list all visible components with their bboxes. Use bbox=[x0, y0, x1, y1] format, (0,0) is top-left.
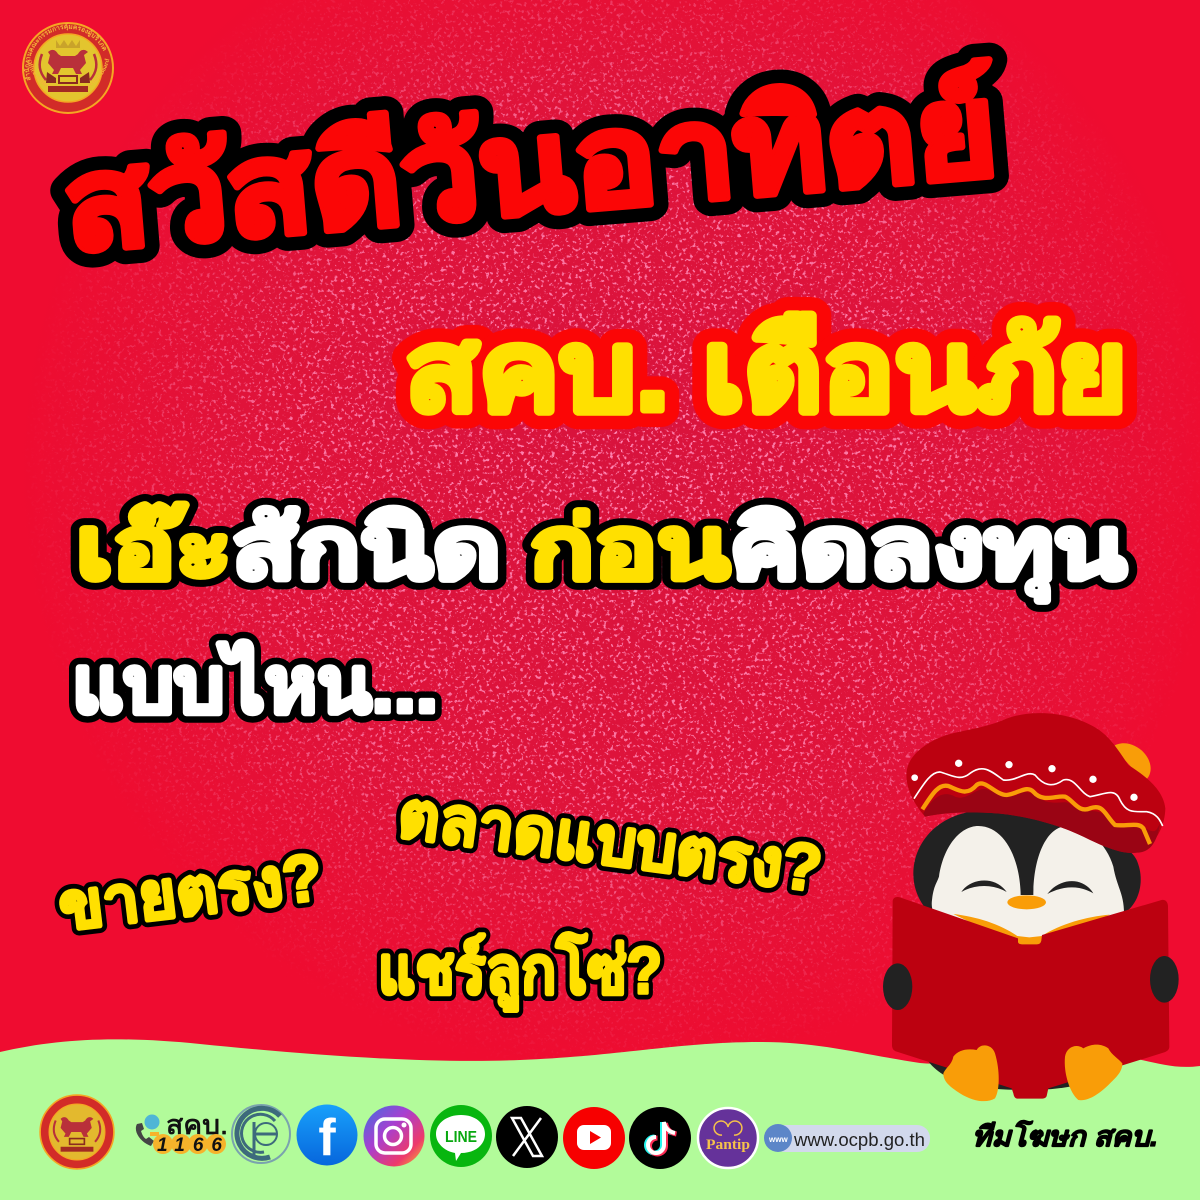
subheading: what kind: แบบไหน... bbox=[72, 640, 438, 729]
logo: OCPB seal footer bbox=[40, 1095, 114, 1169]
icon: LINE: LINE bbox=[445, 1129, 477, 1146]
heading: OCPB warns: สคบ. เตือนภัย bbox=[405, 309, 1127, 434]
heading: OCPB warns: สคบ. เตือนภัย bbox=[405, 309, 1127, 434]
question: direct marketing: ตลาดแบบตรง? bbox=[394, 777, 826, 905]
headline: pause before investing: เอ๊ะ สักนิด ก่อน คิดลงทุน bbox=[76, 501, 1126, 602]
subheading: what kind: แบบไหน... bbox=[72, 640, 438, 729]
credit: PR team: ทีมโฆษก สคบ. bbox=[972, 1119, 1158, 1152]
website pill: www bbox=[768, 1135, 788, 1144]
icon: hotline 1166 bbox=[136, 1110, 228, 1156]
illustration: penguin reading red book bbox=[883, 713, 1179, 1101]
question: chain share: แชร์ลูกโซ่? bbox=[378, 931, 662, 1012]
icon: Pantip bbox=[698, 1108, 758, 1168]
question: direct sales: ขายตรง? bbox=[55, 839, 326, 944]
question: direct marketing: ตลาดแบบตรง? bbox=[394, 777, 826, 905]
footer logo row bbox=[40, 1095, 1158, 1169]
icon: Facebook: f bbox=[318, 1109, 336, 1167]
headline: pause before investing: เอ๊ะสักนิด ก่อนคิดลงทุน bbox=[76, 501, 1126, 602]
icon: CPC circular logo bbox=[232, 1105, 290, 1163]
logo: OCPB seal top left: Office of the Consumer Protection Board bbox=[27, 58, 110, 93]
icon: YouTube bbox=[563, 1107, 625, 1169]
title: greeting: สวัสดีวันอาทิตย์ bbox=[59, 59, 1002, 278]
icon: Facebook bbox=[296, 1104, 358, 1167]
question: chain share: แชร์ลูกโซ่? bbox=[378, 931, 662, 1012]
logo: OCPB seal top left: สำนักงานคณะกรรมการคุ้มครองผู้บริโภค bbox=[24, 23, 106, 81]
icon: TikTok bbox=[629, 1107, 691, 1169]
icon: hotline 1166: 1166 bbox=[157, 1135, 222, 1156]
icon: X bbox=[496, 1106, 558, 1168]
website pill: www.ocpb.go.th bbox=[793, 1129, 925, 1150]
logo: OCPB seal top left bbox=[22, 22, 114, 114]
icon: Pantip: Pantip bbox=[706, 1137, 750, 1153]
question: direct sales: ขายตรง? bbox=[55, 839, 326, 944]
icon: Instagram bbox=[364, 1106, 424, 1166]
footer: green wavy band bbox=[0, 1039, 1200, 1200]
title: greeting: สวัสดีวันอาทิตย์ bbox=[59, 59, 1002, 278]
icon: LINE bbox=[430, 1105, 492, 1167]
icon: hotline 1166: สคบ. bbox=[166, 1110, 228, 1140]
website pill bbox=[764, 1124, 930, 1152]
